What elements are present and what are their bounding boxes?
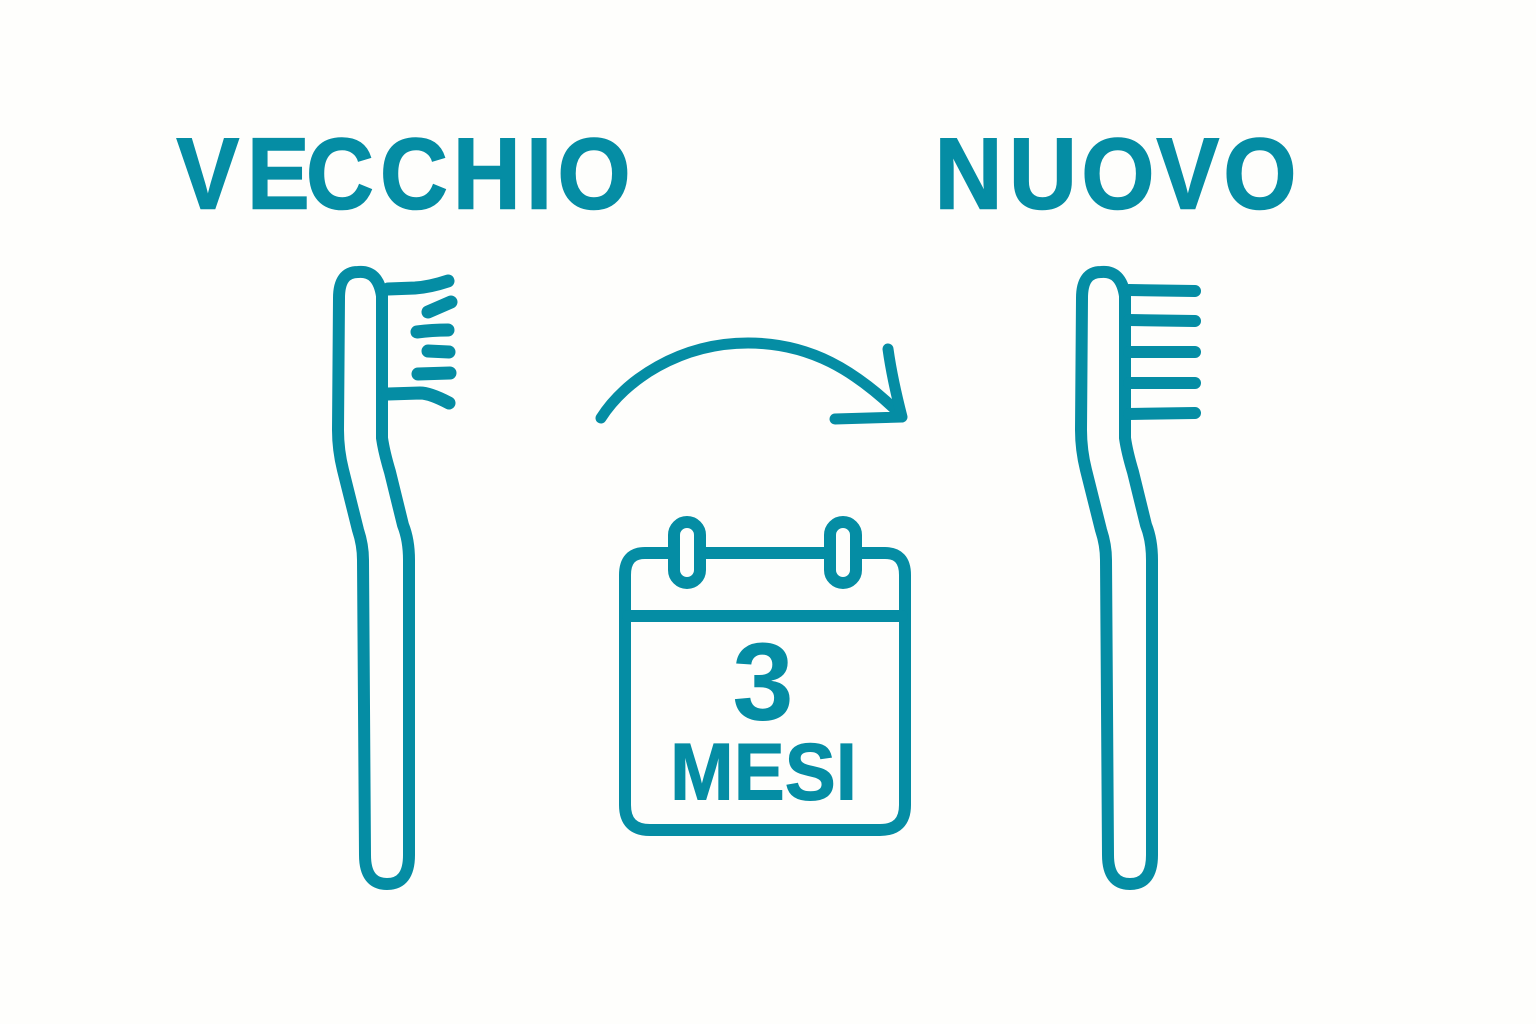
heading: NUOVO: NUOVO bbox=[935, 117, 1296, 230]
icon: calendar 3 mesi bbox=[625, 522, 905, 830]
old toothbrush frayed bristles bbox=[388, 281, 451, 403]
old toothbrush body bbox=[338, 272, 409, 884]
calendar left ring bbox=[674, 522, 700, 583]
calendar number: 3 bbox=[732, 621, 794, 744]
new toothbrush straight bristles bbox=[1129, 290, 1195, 414]
arrow: old to new bbox=[601, 343, 902, 419]
icon: new toothbrush bbox=[1081, 272, 1195, 884]
calendar right ring bbox=[830, 522, 856, 583]
icon: old toothbrush bbox=[338, 272, 451, 884]
calendar frame bbox=[625, 553, 905, 830]
new toothbrush body bbox=[1081, 272, 1152, 884]
heading: VECCHIO: VECCHIO bbox=[177, 117, 631, 230]
calendar header line bbox=[628, 610, 902, 622]
calendar label: MESI bbox=[670, 728, 857, 818]
